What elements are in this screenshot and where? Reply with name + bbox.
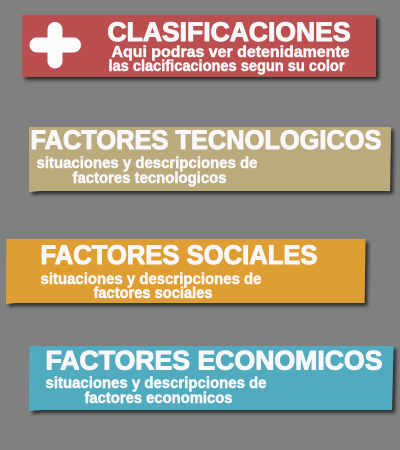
icon: plus	[30, 22, 81, 69]
heading: clasificaciones: CLASIFICACIONES	[108, 17, 350, 47]
banner: tan	[29, 127, 391, 192]
heading: factores economicos: FACTORES ECONOMICOS	[46, 346, 382, 376]
text: description: las clacificaciones segun su color	[108, 58, 344, 75]
banner: red	[22, 15, 376, 77]
panel: factores tecnologicos	[29, 125, 391, 192]
panel: factores economicos	[29, 346, 394, 411]
panel: factores sociales	[6, 239, 366, 304]
text: description: situaciones y descripciones de	[40, 271, 262, 288]
banner: blue	[29, 346, 394, 411]
text: description	[36, 155, 258, 187]
text: description	[40, 271, 262, 302]
text: description	[108, 44, 350, 75]
text: description: situaciones y descripciones de	[36, 155, 258, 172]
heading: factores sociales: FACTORES SOCIALES	[40, 240, 318, 270]
banner: orange	[6, 239, 366, 304]
text: description	[46, 375, 267, 407]
heading: factores tecnologicos: FACTORES TECNOLOGICOS	[30, 125, 382, 155]
panel: clasificaciones	[22, 15, 376, 77]
text: description: factores economicos	[84, 390, 232, 407]
text: description: factores sociales	[94, 285, 212, 302]
text: description: Aqui podras ver detenidamente	[112, 44, 350, 61]
text: description: factores tecnologicos	[72, 170, 226, 187]
text: description: situaciones y descripciones de	[46, 375, 267, 392]
